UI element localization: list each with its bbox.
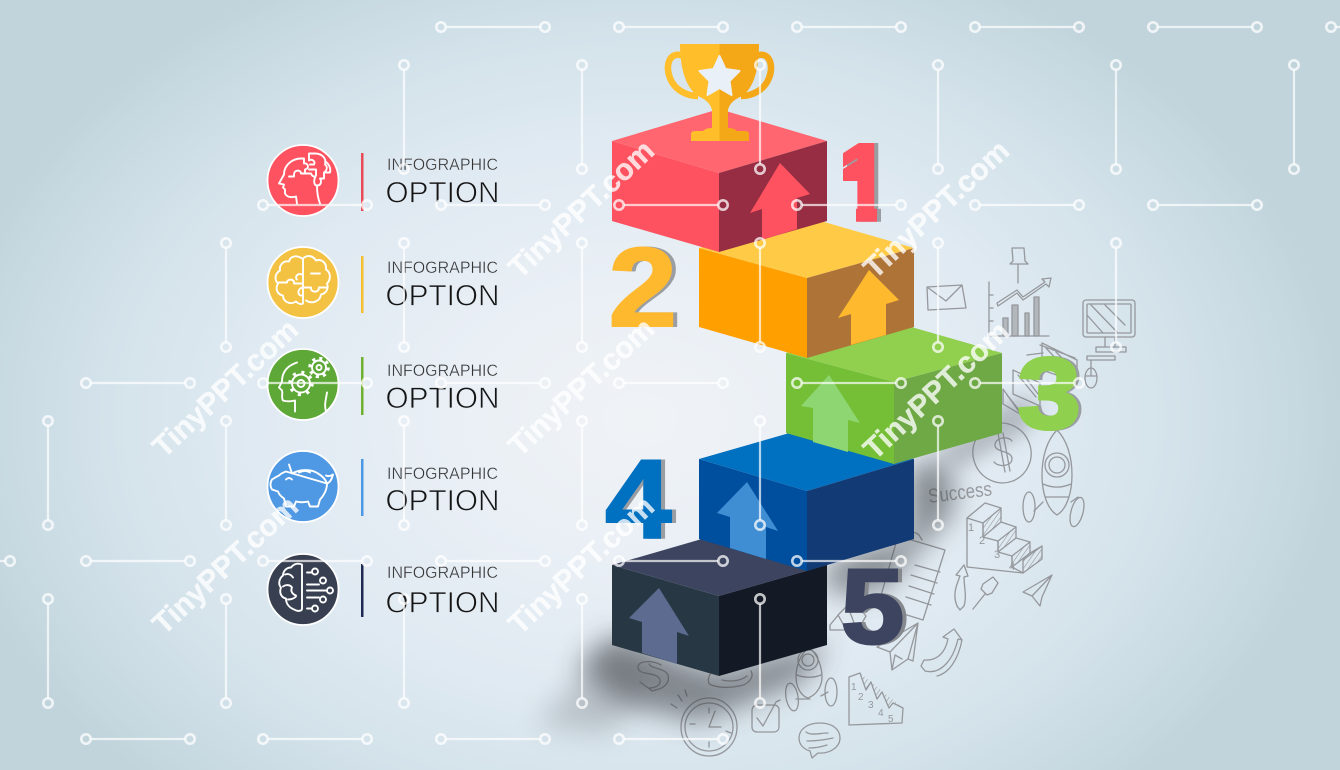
list option 1 bbox=[268, 145, 500, 216]
step 4 cube: blue bbox=[699, 428, 914, 571]
accent bar 5 bbox=[361, 564, 364, 617]
icon: numbered stairs bottom: 3 bbox=[868, 700, 874, 711]
watermark text: TinyPPT.com bbox=[146, 490, 305, 641]
icon: speech bubble bbox=[799, 723, 840, 758]
icon: trophy bbox=[668, 44, 771, 141]
watermark text: TinyPPT.com bbox=[502, 312, 661, 463]
accent bar 3 bbox=[361, 357, 364, 415]
icon: chain links bbox=[708, 664, 752, 687]
icon: brain puzzle bbox=[268, 247, 338, 318]
watermark text bbox=[146, 134, 1016, 641]
number 1: 1 bbox=[832, 120, 894, 245]
icon: head with puzzle bbox=[268, 145, 338, 216]
list option 3 bbox=[268, 349, 500, 420]
icon: numbered stairs: 2 bbox=[979, 535, 985, 547]
arrow on step 2 bbox=[838, 270, 899, 345]
label 1 bbox=[386, 155, 500, 210]
accent bar 4 bbox=[361, 459, 364, 516]
label 2 bbox=[386, 258, 500, 312]
number 4: 4 bbox=[609, 437, 676, 562]
icon: dollar sign bbox=[638, 662, 668, 691]
number 4: 4 bbox=[605, 437, 672, 562]
accent bar 1 bbox=[361, 153, 364, 211]
label 3: INFOGRAPHIC bbox=[387, 361, 498, 380]
number 1 bbox=[843, 143, 881, 222]
watermark text: TinyPPT.com bbox=[857, 134, 1016, 285]
icon: envelope bbox=[927, 285, 966, 310]
text: Success: Success bbox=[927, 478, 993, 508]
icon: push pin bbox=[1010, 248, 1028, 283]
icon: stacked boxes bbox=[1003, 343, 1077, 414]
icon: numbered stairs bottom: 1 bbox=[851, 682, 857, 693]
icon: rocket bbox=[1023, 430, 1087, 528]
icon: numbered stairs bottom bbox=[849, 673, 903, 725]
icon: brain circuit bbox=[268, 554, 338, 625]
arrow on step 5 bbox=[629, 588, 689, 664]
label 5: INFOGRAPHIC bbox=[387, 563, 498, 582]
icon: curved arrow small bbox=[955, 565, 968, 610]
icon: rocket bottom bbox=[784, 647, 837, 712]
label 4: OPTION bbox=[386, 484, 500, 518]
label 4: INFOGRAPHIC bbox=[387, 464, 498, 483]
icon: numbered stairs bottom: 5 bbox=[888, 714, 894, 725]
number 1: 1 bbox=[836, 120, 898, 245]
icon: small paper plane bbox=[1023, 575, 1052, 606]
icon: numbered stairs bottom: 4 bbox=[878, 708, 884, 719]
icon: big curved arrow bbox=[921, 629, 962, 676]
arrow on step 3 bbox=[801, 375, 860, 452]
label 5: OPTION bbox=[386, 586, 500, 620]
label 2: INFOGRAPHIC bbox=[387, 258, 498, 277]
watermark text: TinyPPT.com bbox=[146, 313, 305, 464]
icon: numbered stairs bottom: 2 bbox=[858, 692, 864, 703]
doodle illustrations bbox=[638, 248, 1135, 758]
label 2: OPTION bbox=[386, 280, 500, 312]
icon: numbered stairs: 1 bbox=[968, 522, 974, 534]
icon: check box bbox=[752, 700, 780, 732]
icon: clipboard bbox=[878, 532, 945, 620]
icon: thumb pin bbox=[973, 577, 998, 609]
icon: numbered stairs: 3 bbox=[994, 549, 1000, 561]
label 1: OPTION bbox=[386, 176, 500, 210]
list option 5 bbox=[268, 554, 500, 625]
icon: piggy bank bbox=[268, 451, 338, 522]
icon: clock bbox=[671, 690, 737, 756]
number 1 flag block bbox=[843, 160, 858, 181]
watermark text: TinyPPT.com bbox=[502, 490, 661, 641]
step 5 cube: dark navy bbox=[612, 534, 827, 676]
icon: computer monitor bbox=[1083, 300, 1135, 388]
icon: numbered stairs bbox=[967, 503, 1042, 573]
icon: dollar coin bbox=[964, 415, 1040, 491]
number 5: 5 bbox=[841, 548, 904, 666]
cast shadows bbox=[535, 395, 1035, 735]
label 5 bbox=[386, 563, 500, 620]
icon: growth chart bbox=[989, 278, 1051, 336]
icon: head with gears bbox=[268, 349, 338, 420]
label 3 bbox=[386, 361, 500, 415]
icon: large paper plane bbox=[877, 623, 918, 670]
step 3 cube: green bbox=[786, 322, 1002, 464]
step 1 cube: red bbox=[612, 109, 827, 252]
watermark text: TinyPPT.com bbox=[857, 315, 1016, 466]
number 3: 3 bbox=[1018, 339, 1080, 450]
accent bar 2 bbox=[361, 256, 364, 313]
number 2: 2 bbox=[612, 224, 681, 350]
arrow on step 1 bbox=[750, 163, 810, 240]
icon: numbered stairs: 4 bbox=[1009, 561, 1015, 573]
step 2 cube: orange bbox=[699, 217, 914, 358]
label 1: INFOGRAPHIC bbox=[387, 155, 498, 174]
number 5: 5 bbox=[845, 548, 908, 666]
list option 2 bbox=[268, 247, 500, 318]
watermark text: TinyPPT.com bbox=[502, 134, 661, 285]
number 3: 3 bbox=[1021, 339, 1083, 450]
list option 4 bbox=[268, 451, 500, 522]
label 3: OPTION bbox=[386, 382, 500, 415]
label 4 bbox=[386, 464, 500, 518]
icon: striped box bbox=[830, 605, 866, 630]
number 2: 2 bbox=[608, 224, 677, 350]
arrow on step 4 bbox=[717, 482, 778, 559]
